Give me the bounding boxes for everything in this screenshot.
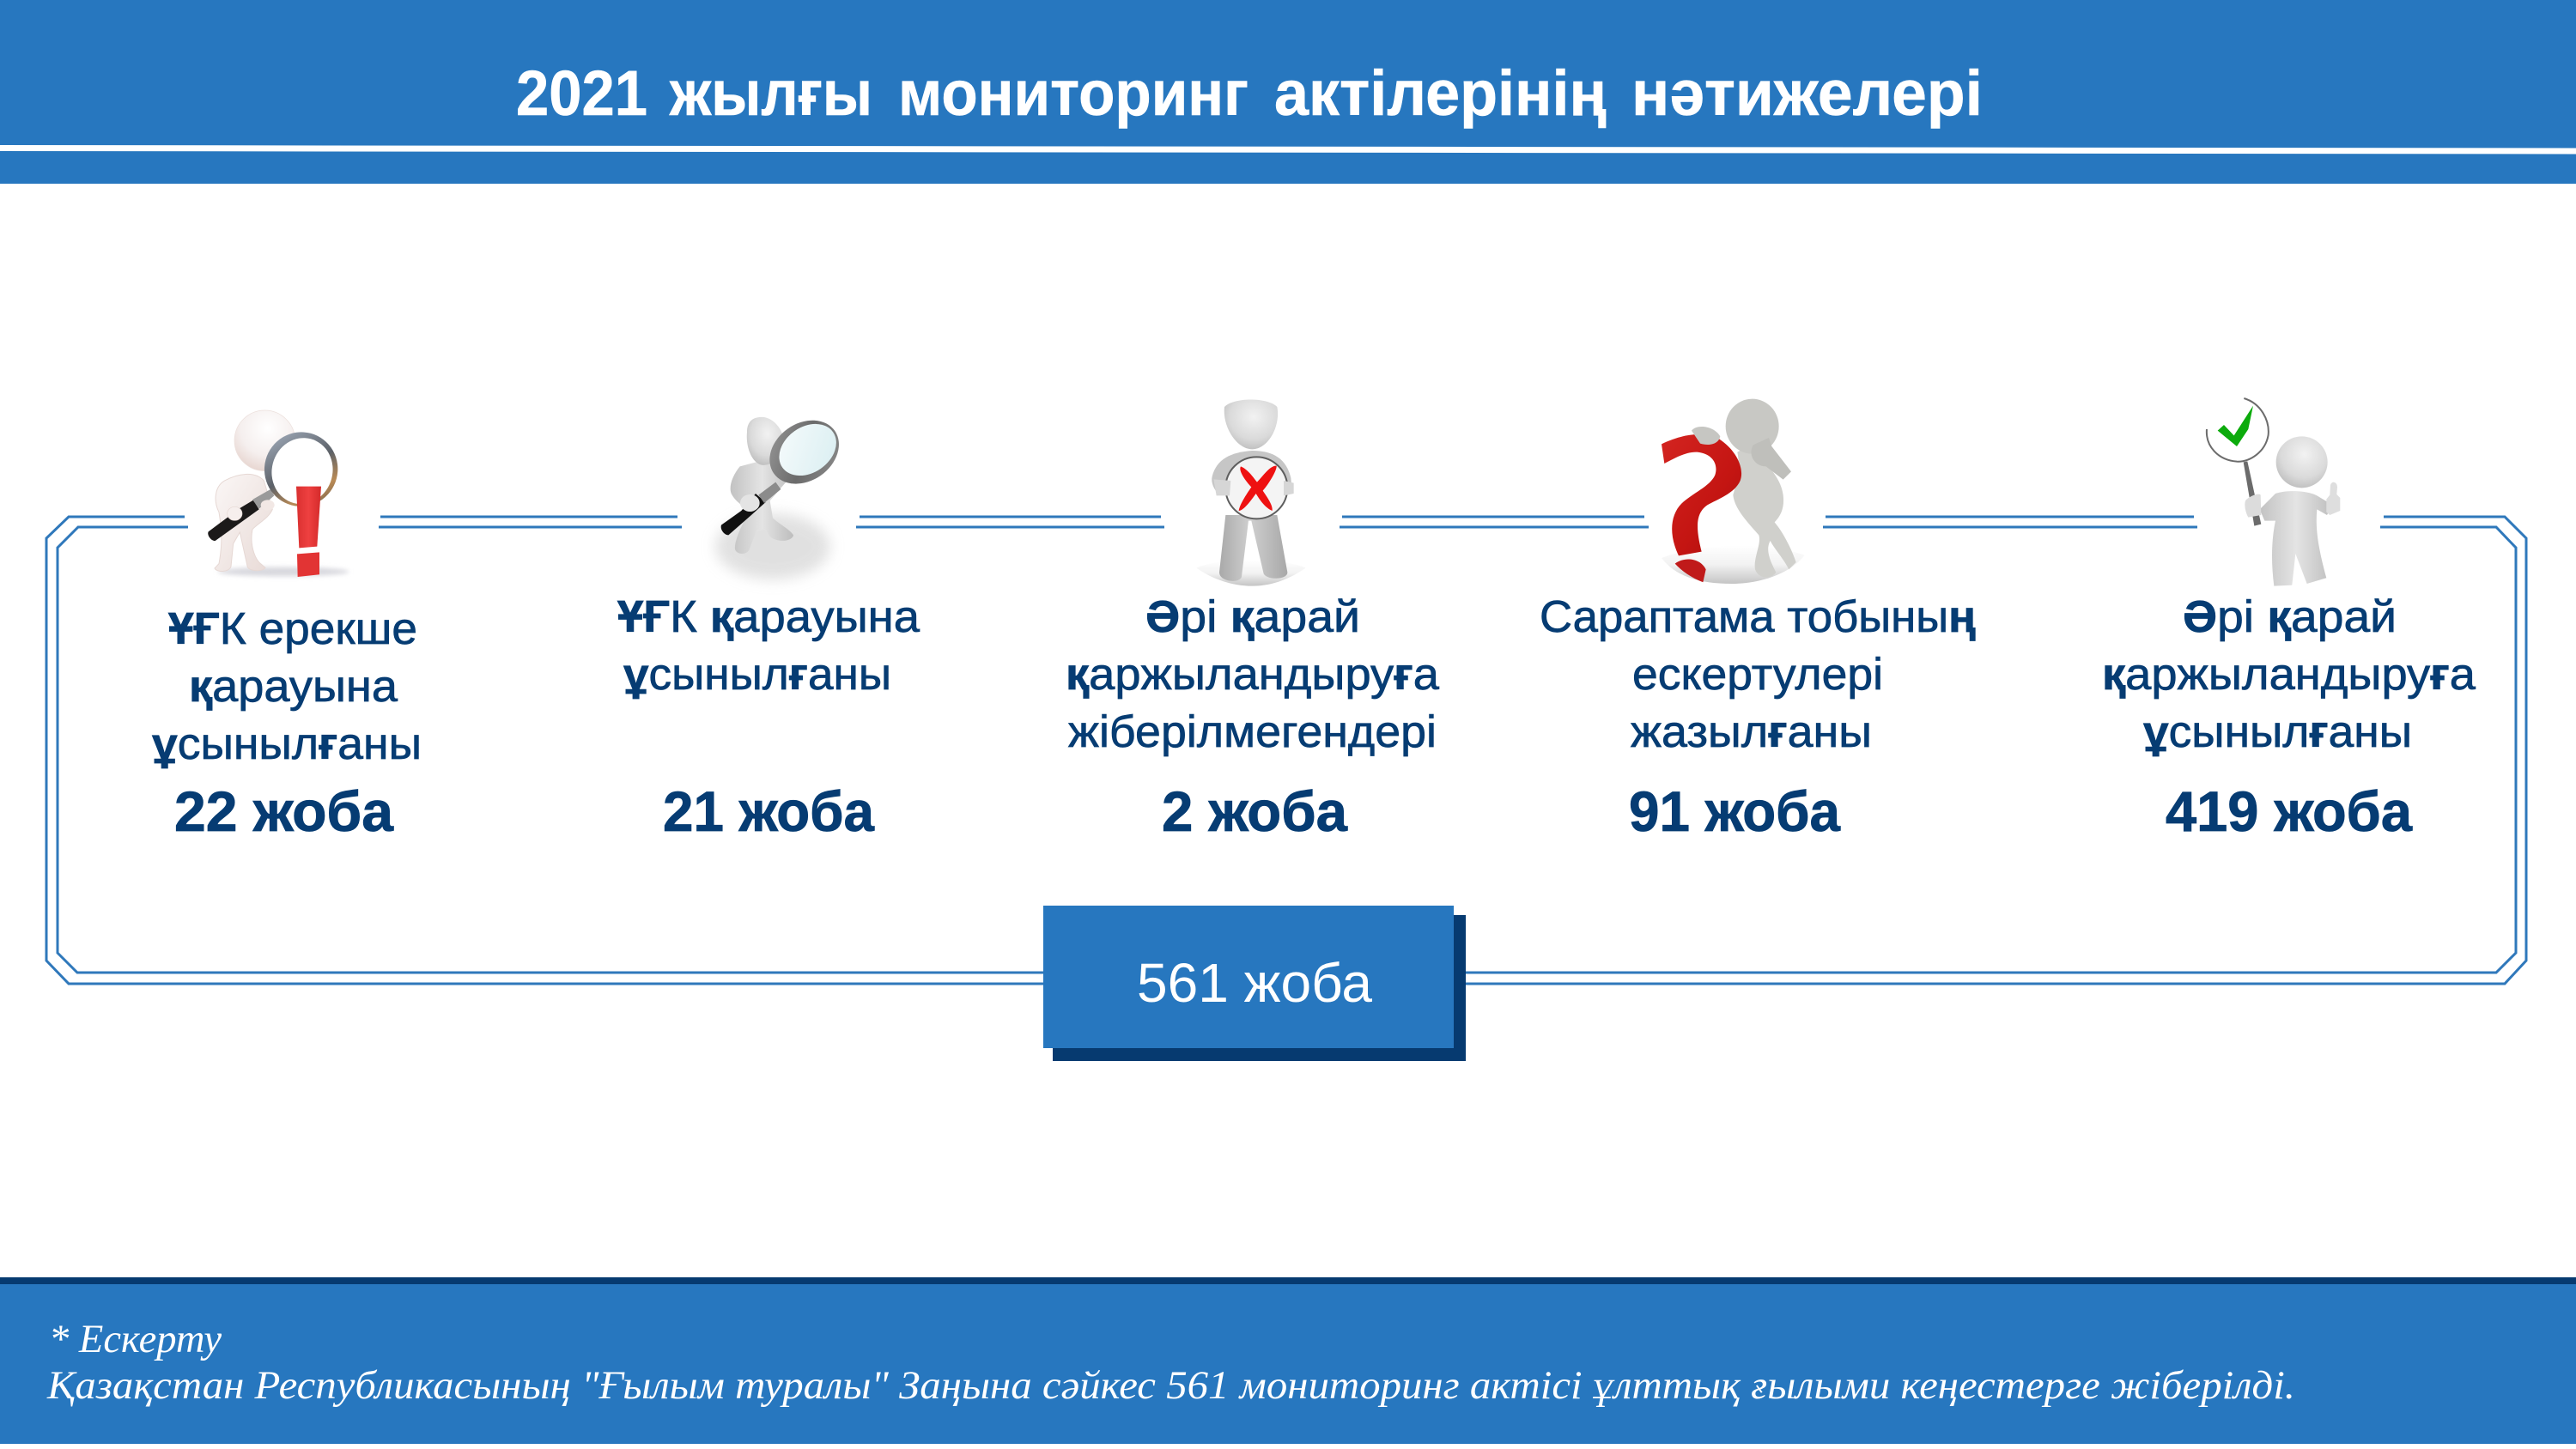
item 3: not sent for further funding: жіберілмегендері <box>1068 707 1437 757</box>
item 5: recommended for further funding: қаржыландыру ға <box>2102 650 2476 700</box>
item 1: special SRC review <box>152 604 422 843</box>
item 3: not sent for further funding <box>1066 592 1439 843</box>
item 5: recommended for further funding: ұсынылғаны <box>2143 707 2412 757</box>
frame: double outline connecting the items <box>46 517 2526 984</box>
item 5: recommended for further funding <box>2102 592 2476 843</box>
title <box>516 58 1983 129</box>
item 2: SRC review: ұсынылғаны <box>623 650 891 700</box>
title: актілерінің <box>1274 58 1607 129</box>
total box: 561 жоба <box>1137 952 1372 1014</box>
item 3: not sent for further funding: Әрі қарай <box>1145 592 1360 642</box>
item 5: recommended for further funding: 419 жоба <box>2166 779 2413 843</box>
icon: figure with magnifier and exclamation mark <box>208 410 349 577</box>
item 1: special SRC review: қарауына <box>189 662 398 712</box>
item 2: SRC review: ҰҒК қарауына <box>617 592 920 642</box>
header rule <box>0 148 2576 151</box>
item 2: SRC review <box>617 592 920 843</box>
icon: figure holding a red cross sign <box>1196 399 1306 586</box>
title: мониторинг <box>898 58 1249 129</box>
icon: figure leaning on a red question mark <box>1662 399 1805 584</box>
item 3: not sent for further funding: қаржыландыру ға <box>1066 650 1439 700</box>
footnote: Қазақстан Республикасының "Ғылым туралы" Заңына сәйкес 561 мониторинг актісі ұлттық ғылыми кеңестерге жіберілді. <box>46 1363 2295 1408</box>
item 2: SRC review: 21 жоба <box>663 779 875 843</box>
item 1: special SRC review: 22 жоба <box>174 779 394 843</box>
header band <box>0 0 2576 184</box>
item 4: expert group remarks <box>1540 592 1976 843</box>
title: жылғы <box>669 58 872 129</box>
footnote <box>46 1317 2295 1408</box>
item 4: expert group remarks: Сараптама тобының <box>1540 592 1976 642</box>
title: 2021 <box>516 58 647 129</box>
item 4: expert group remarks: ескертулері <box>1632 650 1883 700</box>
footnote: * Ескерту <box>49 1317 222 1361</box>
title: нәтижелері <box>1631 58 1983 129</box>
item 5: recommended for further funding: Әрі қарай <box>2183 592 2397 642</box>
item 4: expert group remarks: 91 жоба <box>1629 779 1841 843</box>
footer band <box>0 1277 2576 1444</box>
icon: figure holding a green check sign <box>2207 398 2340 586</box>
item 3: not sent for further funding: 2 жоба <box>1162 779 1348 843</box>
total box <box>1043 906 1466 1061</box>
item 1: special SRC review: ұсынылғаны <box>152 719 422 769</box>
item 1: special SRC review: ҰҒК ерекше <box>168 604 417 654</box>
icon: figure holding a magnifier <box>715 408 851 579</box>
item 4: expert group remarks: жазылғаны <box>1631 707 1872 757</box>
